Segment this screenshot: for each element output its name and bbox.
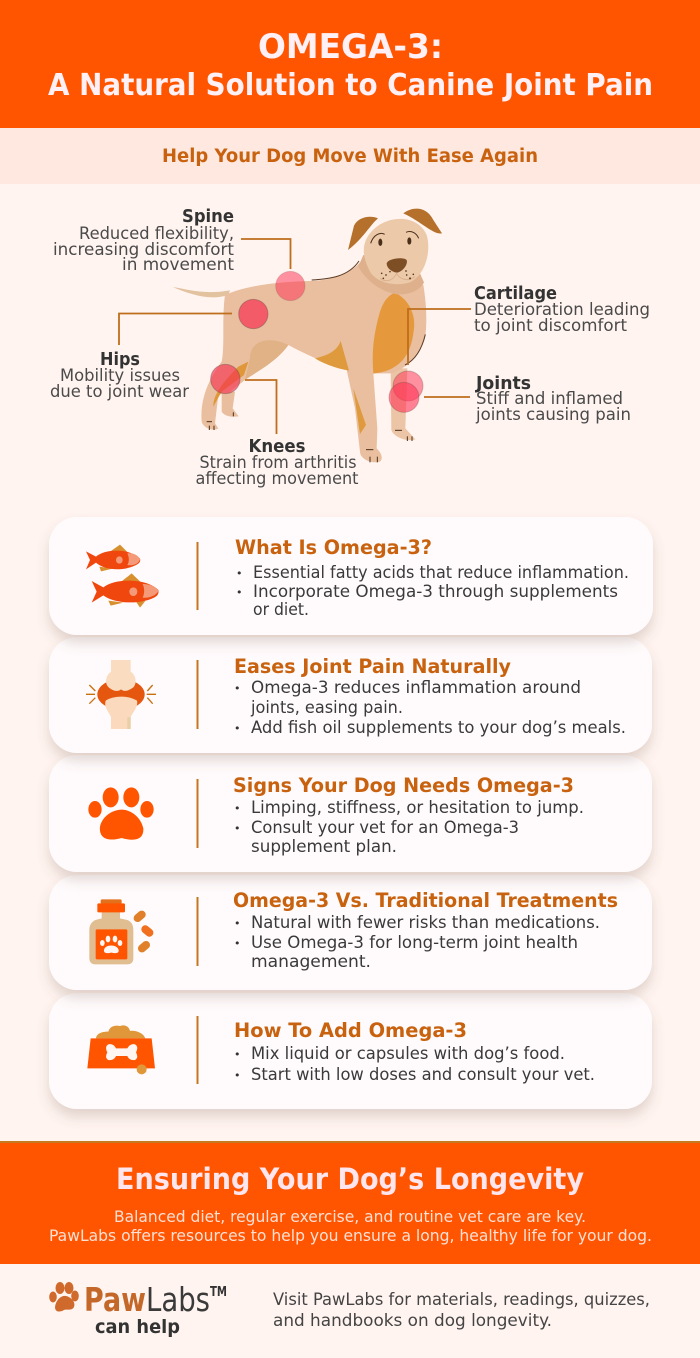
label: joints: joints causing pain [475,405,631,424]
belly marking [315,341,349,371]
bullet list: • [234,682,240,695]
hind leg marking [213,362,248,407]
bullet list [234,678,626,737]
outline strokes [312,261,425,365]
bullet list [234,1044,595,1084]
footer text: Balanced diet, regular exercise, and routine vet care are key. [114,1207,586,1226]
icon: supplement bottle [89,899,155,964]
bullet list [234,798,584,856]
left ear [348,217,378,250]
label: cartilage [474,284,650,335]
label: hips [50,350,189,401]
bullet list: Use Omega-3 for long-term joint health [251,933,578,952]
label: hips: due to joint wear [50,382,189,401]
label: spine [53,207,235,274]
pain point: spine [276,271,305,301]
card 4: versus treatments [49,875,652,990]
neck [358,255,424,294]
bullet list: Start with low doses and consult your vet. [251,1065,595,1084]
icon: paw [88,787,154,840]
head [364,219,428,284]
bullet list: • [234,917,240,930]
heading: How To Add Omega-3 [234,1019,467,1042]
joints connector [424,396,470,398]
heading: Eases Joint Pain Naturally [234,655,511,678]
footer heading: Ensuring Your Dog’s Longevity [116,1162,584,1196]
bullet list: • [234,822,240,835]
icon: food bowl [87,1025,155,1074]
bullet list: Mix liquid or capsules with dog’s food. [251,1044,565,1063]
icon: joint [86,660,156,729]
bullet list: joints, easing pain. [250,698,403,717]
bullet list: • [234,722,240,735]
bullet list: management. [251,952,371,971]
footer banner [0,1141,700,1264]
card 2: eases joint pain [49,637,652,753]
title [48,27,653,103]
heading: What Is Omega-3? [235,536,432,559]
far hind leg [222,392,239,417]
face [371,232,419,281]
bullet list: Incorporate Omega-3 through supplements [253,582,618,601]
bullet list: • [234,1069,240,1082]
connector lines [119,239,471,434]
dog tail [173,287,230,297]
far front leg [391,368,415,440]
bullet list [234,913,600,971]
right ear [403,209,442,233]
heading: Omega-3 Vs. Traditional Treatments [233,889,618,912]
dog body [201,258,426,462]
title: OMEGA-3: [258,27,443,67]
haunch [245,340,288,380]
label: hips: Mobility issues [60,366,180,385]
spine connector [241,239,290,269]
logo: PawLabs: Labs [146,1280,210,1319]
pain point: joints [389,382,419,412]
label: knees: Strain from arthritis [200,453,356,472]
bullet list: Limping, stiffness, or hesitation to jump. [251,798,584,817]
knees connector [245,380,276,434]
label: hips: Hips [100,350,140,370]
subtitle band: Help Your Dog Move With Ease Again [162,146,538,167]
heading: Signs Your Dog Needs Omega-3 [233,774,574,797]
bullet list: • [236,586,242,599]
label: spine: increasing discomfort [53,240,235,259]
footer text: PawLabs offers resources to help you ensure a long, healthy life for your dog. [49,1226,652,1245]
bullet list: supplement plan. [251,837,397,856]
logo: PawLabs: Paw [84,1280,146,1319]
label: spine: Spine [182,207,234,227]
bullet list: Natural with fewer risks than medications. [251,913,600,932]
label: cartilage: Cartilage [474,284,557,304]
logo: PawLabs: can help [95,1316,180,1338]
label: cartilage: Deterioration leading [474,300,650,319]
bullet list: Essential fatty acids that reduce inflammation. [253,563,629,582]
card 5: how to add [49,993,652,1109]
bullet list [236,563,629,619]
label: knees [196,437,359,488]
label: joints: Joints [475,374,531,394]
subtitle band [0,128,700,184]
bullet list: or diet. [253,600,309,619]
label: knees: affecting movement [196,469,359,488]
footer call to action [273,1290,650,1331]
bullet list: • [234,937,240,950]
label: spine: Reduced flexibility, [79,224,234,243]
logo: PawLabs [49,1280,227,1338]
pain point: knees [211,364,240,394]
logo: PawLabs: TM [210,1285,227,1300]
card 3: signs [49,755,652,872]
bullet list: Consult your vet for an Omega-3 [251,818,519,837]
title: A Natural Solution to Canine Joint Pain [48,68,653,103]
bullet list: Add fish oil supplements to your dog’s meals. [251,718,626,737]
pain point: hips [239,299,268,329]
label: knees: Knees [248,437,306,457]
label: spine: in movement [122,255,235,274]
card 1: what is omega-3 [49,517,653,635]
bullet list: • [236,567,242,580]
pain point: cartilage [393,371,423,401]
label: cartilage: to joint discomfort [474,316,628,335]
paw toes [207,412,412,462]
bullet list: • [234,802,240,815]
cartilage connector [408,309,471,365]
footer call to action: and handbooks on dog longevity. [273,1311,552,1331]
hips connector [119,314,232,345]
footer call to action: Visit PawLabs for materials, readings, quizzes, [273,1290,650,1310]
bullet list: • [234,1048,240,1061]
chest marking [373,293,414,374]
label: joints: Stiff and inflamed [476,389,623,408]
header banner [0,0,700,128]
icon: logo paw [49,1282,79,1312]
label: joints [475,374,631,424]
icon: fish [86,545,159,608]
dog illustration with pain points [173,209,442,462]
footer text [49,1207,652,1245]
front leg marking [353,388,366,434]
bullet list: Omega-3 reduces inflammation around [251,678,581,697]
